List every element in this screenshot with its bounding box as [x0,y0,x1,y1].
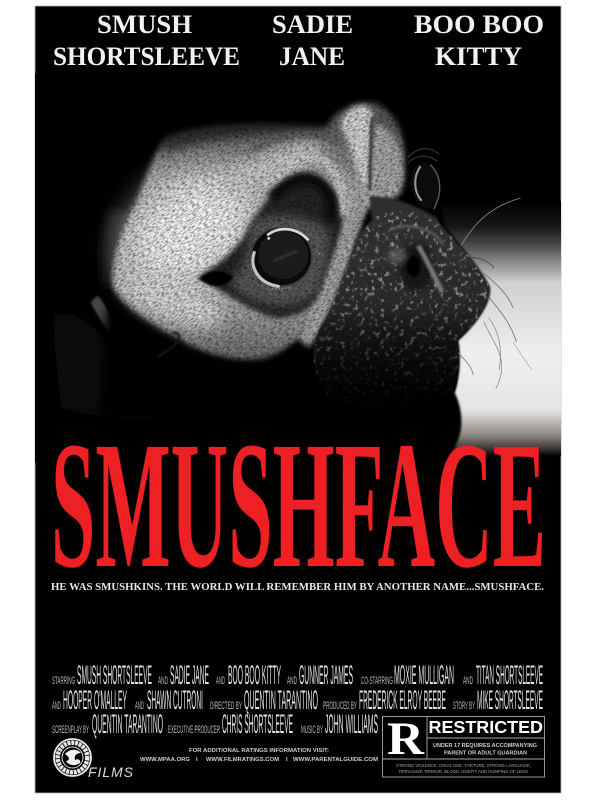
letter R: R [387,713,425,765]
box frame [382,716,544,777]
rating reasons: STRONG VIOLENCE, DRUG USE, TORTURE, STRONG LANGUAGE, [396,763,531,768]
credits line 2: DIRECTED BY [210,700,242,712]
under 17 notice: PARENT OR ADULT GUARDIAN [444,750,527,756]
credits line 3: EXECUTIVE PRODUCER [168,724,220,736]
billing credits [52,660,543,739]
far eye ball [408,160,443,210]
name: sadie jane [272,9,353,71]
name: smush shortsleeve: SMUSH [97,9,192,39]
lid speckles [272,251,322,289]
credits line 1 [52,660,543,690]
far eye left rim [415,166,422,201]
credits line 1: SADIE JANE [170,660,209,690]
wrinkle light [340,105,372,190]
credits line 2 [52,685,543,715]
credits line 1: AND [463,675,473,687]
name: smush shortsleeve [53,9,240,71]
bright background behind muzzle [444,200,561,456]
name: boo boo kitty: KITTY [435,41,522,71]
name: boo boo kitty: BOO BOO [414,9,544,39]
muzzle lower fade [316,300,484,406]
billing credits: JOHN WILLIAMS [325,709,378,739]
iris [258,231,308,279]
top of head fade [158,115,327,154]
name: boo boo kitty [414,9,544,71]
name: sadie jane: SADIE [272,9,353,39]
muzzle shape [314,210,490,407]
credits line 2: HOOPER O'MALLEY [63,685,127,715]
main eye [251,227,322,289]
lower cheek light [117,278,230,338]
wrinkle under far eye [370,196,441,227]
top ring highlight [268,229,308,239]
second wrinkle light [372,123,403,190]
dark patch around eye [197,173,344,318]
nasal fold [303,204,358,342]
lower left crescent [253,252,278,286]
nose fold [389,226,443,245]
dark head silhouette [30,73,490,463]
wrinkle dark line [370,118,372,190]
ratings line 2: WWW.FILMRATINGS.COM [206,757,279,763]
credits line 1: GUNNER JAMES [299,660,353,690]
credits line 1: AND [158,675,168,687]
rating box [382,713,544,777]
star names [53,9,544,71]
far eye [408,149,443,210]
lashes [408,149,439,163]
lit face base [112,102,405,361]
brow inner shadow [272,179,332,221]
films wordmark: FILMS [88,764,134,780]
credits line 1: BOO BOO KITTY [228,660,281,690]
credits line 2: QUENTIN TARANTINO [244,685,318,715]
credits line 3: QUENTIN TARANTINO [92,709,163,739]
credits line 2: SHAWN CUTRONI [147,685,203,715]
pug photo [35,72,561,464]
brow top dark [251,135,337,151]
bright cheek core [102,150,267,290]
credits line 3: SCREENPLAY BY [52,724,89,736]
under 17 notice [433,743,537,756]
fur texture [108,101,408,362]
nostril [407,255,421,277]
muzzle bumps texture [314,210,490,406]
logo emblem [54,739,91,776]
brow rim [266,157,344,216]
name: smush shortsleeve: SHORTSLEEVE [53,41,240,71]
forehead light [220,136,334,194]
rating reasons [396,763,531,774]
credits line 2: STORY BY [453,700,475,712]
name: sadie jane: JANE [279,41,345,71]
catch light [267,237,270,240]
rating reasons: PERVASIVE TERROR, BLOOD, NUDITY AND HUMPING OF LEGS [399,769,528,774]
ear fold [102,208,130,287]
pupil reflection [273,251,297,261]
credits line 2: AND [52,700,61,712]
forehead wrinkles [251,105,403,190]
restricted: RESTRICTED [428,717,543,737]
ratings information [140,748,378,763]
far eye right rim [430,165,440,209]
patch lighter side [232,216,329,305]
studio logo [54,739,134,780]
ratings line 2: WWW.MPAA.ORG [140,757,190,763]
inner corner shadow [199,271,234,286]
under 17 notice: UNDER 17 REQUIRES ACCOMPANYING [433,743,537,749]
credits line 3: CHRIS SHORTSLEEVE [222,709,293,739]
credits line 1: SMUSH SHORTSLEEVE [77,660,152,690]
lower left shade [54,314,101,416]
cheek spot [158,333,179,356]
ratings line 2: I [196,757,198,763]
eyeball [251,227,312,286]
nose lit speckle [388,248,407,264]
credits line 1: AND [287,675,297,687]
neck and ear shading [51,208,223,419]
muzzle [314,210,492,406]
tagline: HE WAS SMUSHKINS. THE WORLD WILL REMEMBER HIM BY ANOTHER NAME...SMUSHFACE. [51,582,544,593]
ear sliver highlight [90,296,111,334]
credits line 2: AND [135,700,144,712]
nostril area shade [399,242,434,290]
ratings line 2: WWW.PARENTALGUIDE.COM [293,757,378,763]
credits line 3: MUSIC BY [301,724,323,736]
ratings line 1: FOR ADDITIONAL RATINGS INFORMATION VISIT: [189,748,329,754]
credits line 1: AND [216,675,225,687]
lower cheek fade [100,308,296,414]
ratings line 2 [140,757,378,763]
whiskers [458,198,532,389]
credits line 1: STARRING [52,675,75,687]
ratings line 2: I [286,757,288,763]
credits line 1: CO-STARRING [361,675,393,687]
credits line 2: PRODUCED BY [323,700,357,712]
nose ridge [418,246,442,292]
